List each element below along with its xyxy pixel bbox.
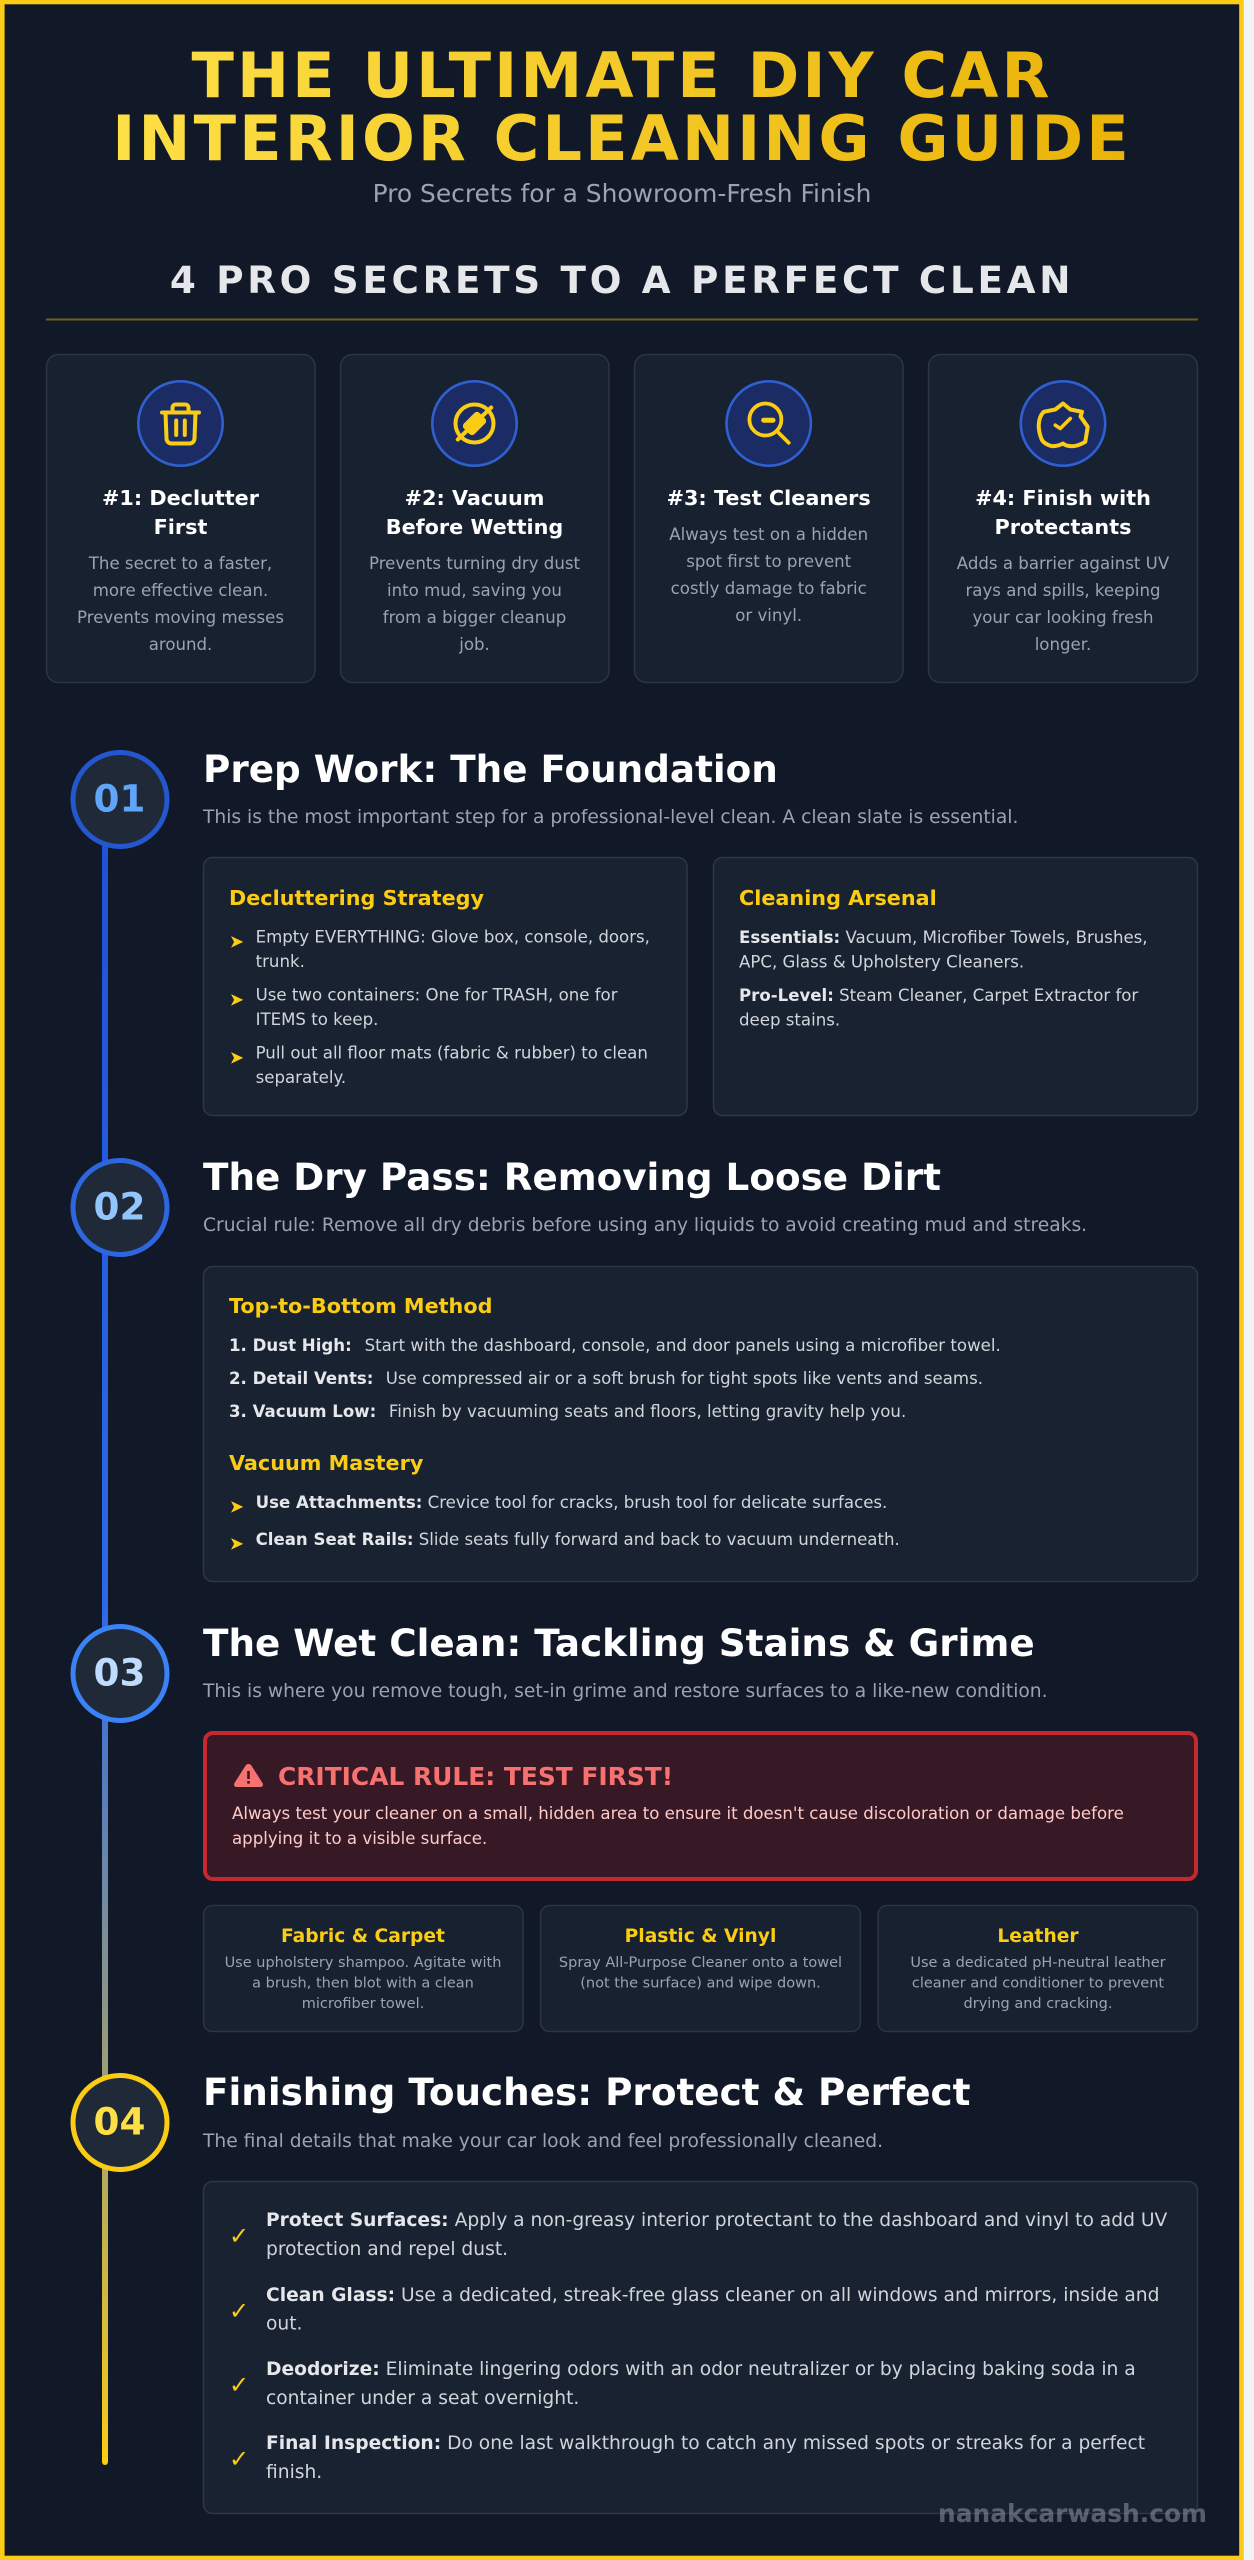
panel: leather: cleaner and conditioner to prevent (912, 1976, 1164, 1992)
title: THE ULTIMATE DIY CAR (191, 39, 1053, 112)
secret 1 title: First (154, 515, 207, 539)
panel: leather: Use a dedicated pH-neutral leather (910, 1955, 1166, 1971)
tools text: Essentials: Vacuum, Microfiber Towels, Brushes, (739, 928, 1148, 947)
secret 3 text (669, 525, 868, 625)
panel: leather: drying and cracking. (964, 1996, 1112, 2012)
step 2 marker: 02 (94, 1184, 145, 1228)
method steps: 3. Vacuum Low: (229, 1402, 376, 1421)
bullet list: ITEMS to keep. (256, 1010, 378, 1029)
panel: leather: Leather (997, 1926, 1079, 1947)
checklist item: deodorize: ✓ (229, 2371, 249, 2399)
step 4 marker: 04 (94, 2100, 145, 2144)
checklist item: protect surfaces: Protect Surfaces: Apply a non-greasy interior protectant to the dashboard and vinyl to add UV (266, 2210, 1168, 2231)
panel: finishing checklist (204, 2182, 1198, 2514)
checklist item: clean glass: out. (266, 2314, 302, 2334)
callout text: applying it to a visible surface. (232, 1829, 487, 1848)
method steps: Use compressed air or a soft brush for tight spots like vents and seams. (386, 1369, 983, 1388)
checklist item: final inspection: Final Inspection: Do one last walkthrough to catch any missed spots or streaks for a perfect (266, 2433, 1145, 2454)
checklist item: clean glass: ✓ (229, 2297, 249, 2325)
panel: fabric and carpet: microfiber towel. (302, 1996, 424, 2012)
step 4 description: The final details that make your car look and feel professionally cleaned. (202, 2131, 883, 2152)
secret 1 text: The secret to a faster, (88, 554, 272, 573)
top-to-bottom heading: Top-to-Bottom Method (229, 1294, 492, 1318)
secret 1 text: more effective clean. (93, 581, 268, 600)
bullet list: separately. (256, 1068, 346, 1087)
secret 1 title: #1: Declutter (102, 486, 260, 510)
secret 3 text: costly damage to fabric (671, 579, 867, 598)
checklist item: final inspection: finish. (266, 2462, 322, 2483)
secret 1 text: Prevents moving messes (77, 608, 284, 627)
secret 4 text: Adds a barrier against UV (957, 554, 1170, 573)
bullet list: Empty EVERYTHING: Glove box, console, doors, (256, 928, 650, 947)
bullet list: ➤ (229, 932, 244, 952)
panel heading: Cleaning Arsenal (739, 886, 937, 910)
step 1 marker: 01 (94, 776, 145, 820)
panel: decluttering strategy (204, 858, 687, 1116)
checklist item: final inspection (229, 2433, 1145, 2483)
checklist item: protect surfaces: protection and repel dust. (266, 2239, 508, 2260)
secret 2 title (386, 486, 563, 539)
method steps: 2. Detail Vents: (229, 1369, 373, 1388)
icon: trash can (162, 404, 199, 444)
method steps: 1. Dust High: (229, 1336, 352, 1355)
panel: fabric and carpet: Fabric & Carpet (281, 1926, 445, 1947)
timeline line (102, 790, 108, 2465)
step 3 marker (73, 1626, 167, 1720)
secret 3 text: or vinyl. (735, 606, 802, 625)
bullet list: Use two containers: One for TRASH, one for (256, 986, 618, 1005)
icon: magnifier (749, 404, 789, 443)
bullet list: ➤ (229, 990, 244, 1010)
panel: secret 3 test (634, 354, 903, 682)
secret 4 text: longer. (1035, 635, 1091, 654)
secret 2 title: Before Wetting (386, 515, 563, 539)
secret 1 text: around. (149, 635, 212, 654)
checklist item: protect surfaces: ✓ (229, 2222, 249, 2250)
icon: warning triangle (234, 1764, 263, 1787)
bullet list: ➤ (229, 1048, 244, 1068)
vacuum tips: ➤ (229, 1534, 244, 1554)
secret 1 title (102, 486, 260, 539)
secret 2 text: from a bigger cleanup (383, 608, 566, 627)
panel: plastic and vinyl: Plastic & Vinyl (625, 1926, 776, 1947)
vacuum tips: Use Attachments: Crevice tool for cracks, brush tool for delicate surfaces. (256, 1493, 887, 1512)
step 2 description: Crucial rule: Remove all dry debris before using any liquids to avoid creating mud and streaks. (203, 1215, 1087, 1236)
step 2 heading: The Dry Pass: Removing Loose Dirt (203, 1155, 941, 1199)
step 2 marker (73, 1160, 167, 1254)
vacuum tips (229, 1493, 900, 1554)
panel: plastic and vinyl: Spray All-Purpose Cleaner onto a towel (559, 1955, 842, 1971)
panel: secret 2 vacuum (340, 354, 609, 682)
secret 4 title: Protectants (995, 515, 1131, 539)
vacuum tips: Clean Seat Rails: Slide seats fully forward and back to vacuum underneath. (256, 1530, 900, 1549)
checklist item: deodorize (229, 2359, 1136, 2409)
panel: secret 1 declutter (46, 354, 315, 682)
step 3 description: This is where you remove tough, set-in grime and restore surfaces to a like-new condition. (202, 1681, 1048, 1702)
callout heading: CRITICAL RULE: TEST FIRST! (278, 1762, 673, 1791)
panel: plastic and vinyl: (not the surface) and wipe down. (580, 1976, 821, 1992)
secret 4 text (957, 554, 1170, 654)
checklist item: clean glass (229, 2285, 1159, 2334)
callout text: Always test your cleaner on a small, hidden area to ensure it doesn't cause discoloration or damage before (232, 1804, 1124, 1823)
vacuum tips: ➤ (229, 1496, 244, 1518)
step 3 heading: The Wet Clean: Tackling Stains & Grime (203, 1621, 1035, 1665)
secret 3 title: #3: Test Cleaners (667, 486, 871, 510)
secret 4 text: your car looking fresh (972, 608, 1154, 627)
step 3 marker: 03 (94, 1650, 145, 1694)
icon: shield check (1039, 404, 1088, 446)
heading: 4 pro secrets: 4 PRO SECRETS TO A PERFECT CLEAN (170, 258, 1074, 302)
step 4 heading: Finishing Touches: Protect & Perfect (203, 2070, 970, 2114)
secret 3 text: spot first to prevent (686, 552, 852, 571)
panel: fabric and carpet: Use upholstery shampoo. Agitate with (225, 1955, 501, 1971)
checklist item: deodorize: Deodorize: Eliminate lingering odors with an odor neutralizer or by placing baking soda in a (266, 2359, 1136, 2380)
checklist item: final inspection: ✓ (229, 2445, 249, 2473)
panel: dry pass (204, 1266, 1198, 1582)
icon: vacuum no-dust (456, 404, 494, 442)
secret 2 text: Prevents turning dry dust (369, 554, 580, 573)
panel: plastic and vinyl (540, 1906, 860, 2032)
panel heading: Decluttering Strategy (229, 886, 485, 910)
secret 1 text (77, 554, 284, 654)
method steps (229, 1336, 1001, 1421)
checklist item: clean glass: Clean Glass: Use a dedicated, streak-free glass cleaner on all windows and mirrors, inside and (266, 2285, 1159, 2306)
bullet list (229, 928, 650, 1087)
callout: critical rule (205, 1733, 1196, 1879)
panel: fabric and carpet: a brush, then blot with a clean (252, 1976, 474, 1992)
step 1 marker (73, 752, 167, 846)
bullet list: Pull out all floor mats (fabric & rubber) to clean (256, 1044, 648, 1063)
vacuum mastery heading: Vacuum Mastery (229, 1451, 424, 1475)
secret 2 title: #2: Vacuum (405, 486, 544, 510)
subtitle: Pro Secrets for a Showroom-Fresh Finish (373, 179, 871, 208)
title: INTERIOR CLEANING GUIDE (112, 102, 1132, 175)
secret 2 text: job. (458, 635, 490, 654)
method steps: Start with the dashboard, console, and door panels using a microfiber towel. (365, 1336, 1001, 1355)
panel: secret 4 protect (928, 354, 1198, 682)
secret 4 title (975, 486, 1151, 539)
callout text (232, 1804, 1124, 1848)
method steps: Finish by vacuuming seats and floors, letting gravity help you. (389, 1402, 906, 1421)
step 1 heading: Prep Work: The Foundation (203, 747, 778, 791)
step 1 description: This is the most important step for a professional-level clean. A clean slate is essential. (202, 807, 1018, 828)
checklist item: deodorize: container under a seat overnight. (266, 2388, 579, 2409)
checklist item: protect surfaces (229, 2210, 1168, 2260)
secret 2 text: into mud, saving you (387, 581, 562, 600)
secret 4 title: #4: Finish with (975, 486, 1151, 510)
tools text: APC, Glass & Upholstery Cleaners. (739, 952, 1024, 972)
secret 2 text (369, 554, 580, 654)
panel: fabric and carpet (204, 1906, 523, 2032)
secret 4 text: rays and spills, keeping (965, 581, 1161, 600)
tools text: Pro-Level: Steam Cleaner, Carpet Extractor for (739, 986, 1138, 1005)
bullet list: trunk. (256, 952, 305, 971)
secret 3 text: Always test on a hidden (669, 525, 868, 544)
panel: cleaning arsenal (714, 858, 1198, 1116)
watermark: nanakcarwash.com (938, 2499, 1207, 2528)
tools text (739, 928, 1148, 1030)
tools text: deep stains. (739, 1010, 840, 1030)
title (112, 39, 1132, 175)
panel: leather (878, 1906, 1198, 2032)
step 4 marker (73, 2076, 167, 2170)
